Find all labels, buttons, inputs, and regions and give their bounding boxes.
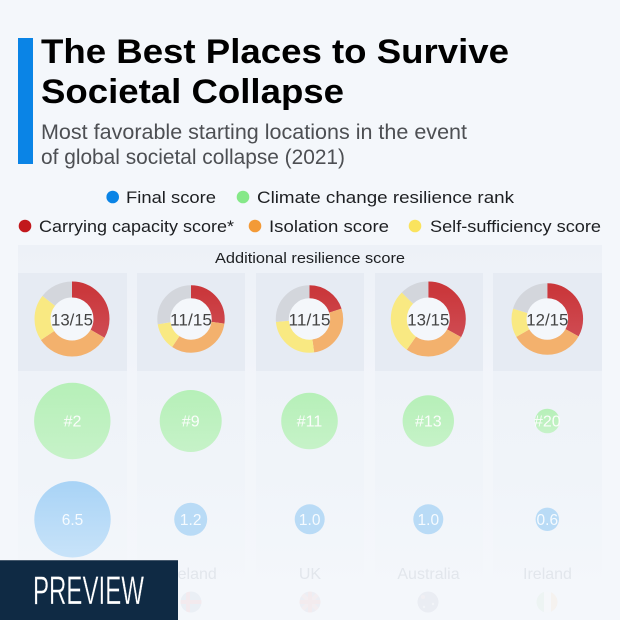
- donut: Iceland 11/15: [163, 291, 219, 347]
- legend: Climate change resilience rank: [257, 188, 515, 207]
- flag: Iceland: [180, 591, 202, 613]
- country labels: New Zealand: [25, 566, 119, 583]
- title: [41, 33, 509, 111]
- donut: UK 11/15: 11/15: [288, 310, 330, 330]
- climate change resilience rank bubbles: [34, 383, 561, 459]
- flag: UK: [299, 591, 321, 613]
- flag: Ireland: [542, 592, 558, 612]
- title: The Best Places to Survive: [41, 33, 509, 71]
- final score bubbles: [34, 481, 559, 558]
- final score bubbles: 1.0: [418, 512, 439, 529]
- preview badge: PREVIEW: [33, 569, 144, 613]
- panel heading: Additional resilience score: [215, 251, 405, 267]
- column backgrounds: [18, 273, 602, 591]
- final score bubbles: 1.0: [299, 512, 321, 529]
- legend: Self-sufficiency score: [430, 217, 601, 236]
- donut: New Zealand 13/15: 13/15: [51, 310, 93, 330]
- subtitle: Most favorable starting locations in the event: [41, 121, 467, 144]
- legend: [19, 188, 601, 236]
- title: Societal Collapse: [41, 73, 344, 111]
- country labels: Ireland: [523, 566, 572, 583]
- donut: Iceland 11/15: 11/15: [170, 310, 212, 330]
- preview badge: [0, 560, 178, 620]
- accent bar: [18, 38, 33, 164]
- donut: Australia 13/15: [398, 289, 458, 349]
- flag: Australia: [417, 591, 439, 613]
- donut: New Zealand 13/15: [42, 289, 102, 349]
- donut: Ireland 12/15: [518, 290, 576, 348]
- legend: Isolation score: [269, 217, 389, 236]
- donut: Australia 13/15: 13/15: [407, 310, 449, 330]
- country labels: Iceland: [165, 566, 217, 583]
- subtitle: of global societal collapse (2021): [41, 146, 345, 169]
- country labels: UK: [299, 566, 321, 583]
- legend: Carrying capacity score*: [39, 217, 234, 236]
- climate change resilience rank bubbles: #11: [297, 414, 322, 431]
- climate change resilience rank bubbles: #2: [64, 414, 82, 431]
- legend: Final score: [126, 188, 216, 207]
- country labels: [25, 566, 572, 583]
- climate change resilience rank bubbles: #9: [182, 414, 200, 431]
- country labels: Australia: [397, 566, 460, 583]
- climate change resilience rank bubbles: #20: [534, 414, 561, 431]
- donut: UK 11/15: [282, 291, 338, 347]
- donut: Ireland 12/15: 12/15: [526, 310, 568, 330]
- subtitle: [41, 121, 467, 169]
- climate change resilience rank bubbles: #13: [415, 414, 442, 431]
- final score bubbles: 6.5: [62, 512, 83, 529]
- final score bubbles: 1.2: [180, 512, 201, 529]
- final score bubbles: 0.6: [537, 512, 558, 529]
